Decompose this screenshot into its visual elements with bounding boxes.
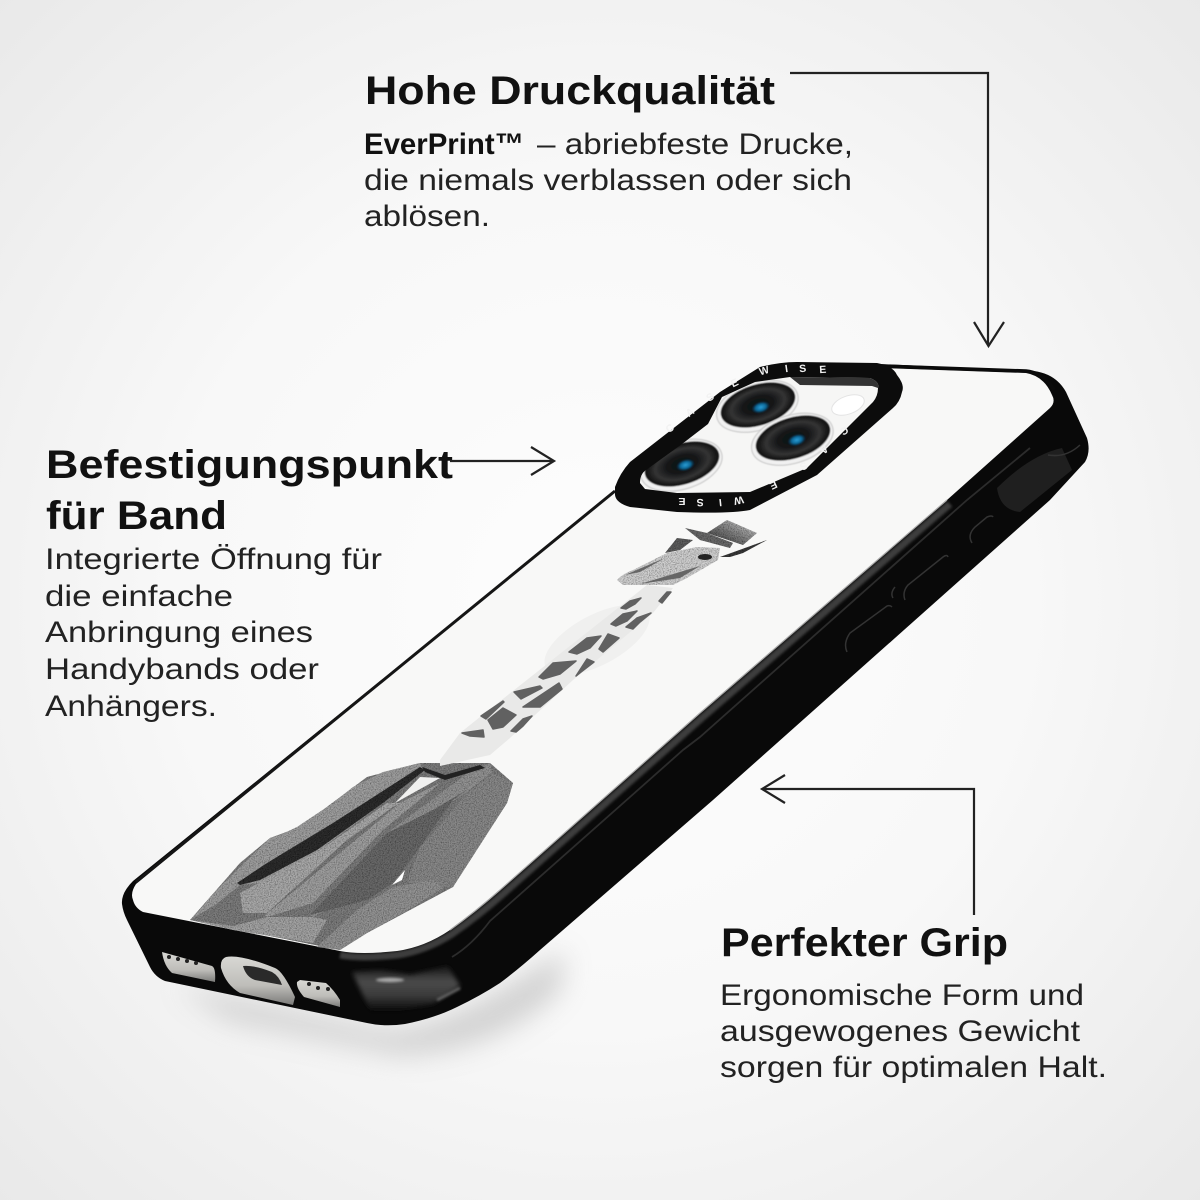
top border line: [880, 366, 1054, 390]
brand lettering bottom: S: [696, 496, 704, 508]
button gap arc: [892, 587, 895, 598]
corner streak: [437, 988, 460, 1000]
brand lettering bottom: C: [837, 423, 851, 438]
brand lettering top: C: [663, 421, 677, 436]
callout: Befestigungspunkt für Band: [45, 443, 453, 723]
body text: Handybands oder: [45, 653, 319, 686]
body text: Integrierte Öffnung für: [45, 543, 382, 576]
speaker holes right: [307, 982, 330, 991]
lower coat hem: [190, 917, 327, 943]
rim highlight: [450, 500, 947, 930]
side grip groove: [452, 448, 1030, 957]
brand lettering top: E: [729, 376, 740, 390]
island glass base: [615, 363, 902, 510]
body text: [364, 128, 853, 233]
body text: – abriebfeste Drucke,: [537, 128, 853, 161]
speaker holes left: [167, 955, 198, 965]
suit jacket: [190, 763, 513, 950]
heading: Perfekter Grip: [721, 921, 1008, 965]
lens left: [634, 430, 729, 500]
brand lettering bottom: E: [768, 478, 779, 492]
hat brim: [685, 528, 733, 548]
brand lettering bottom: [678, 423, 851, 508]
head shading: [625, 558, 700, 584]
flash: [829, 391, 867, 419]
heading: Befestigungspunkt: [46, 443, 453, 487]
body text: Anhängers.: [45, 690, 217, 723]
bow tie: [422, 765, 485, 780]
glossy bottom corner: [352, 966, 460, 1010]
collar: [440, 733, 510, 766]
soft rim along lower edge: [340, 504, 950, 957]
volume button upper: [904, 556, 948, 600]
volume button lower: [846, 606, 892, 652]
right lapel: [310, 763, 492, 917]
suit gap: [392, 870, 405, 885]
hat side brim: [720, 540, 767, 557]
brand lettering bottom: S: [797, 459, 810, 473]
left border line: [136, 491, 615, 882]
callout: Perfekter Grip: [720, 921, 1107, 1084]
magsafe ring: [534, 591, 660, 689]
vest left: [240, 803, 400, 913]
vest right: [265, 783, 440, 917]
inner top band: [790, 377, 878, 388]
body text: die einfache: [45, 580, 233, 613]
arrow: to top of case: [790, 73, 1004, 346]
island frame: [615, 362, 903, 513]
heading: [46, 443, 453, 538]
right sleeve: [407, 773, 513, 887]
head: [617, 547, 720, 585]
action button: [970, 516, 993, 543]
ear: [665, 538, 693, 553]
bottom speaker right: [297, 980, 340, 1007]
side curve highlight: [1048, 445, 1080, 456]
neck: [460, 585, 673, 738]
body text: [45, 543, 382, 723]
bottom speaker left: [162, 952, 215, 982]
body text: ablösen.: [364, 200, 490, 233]
lens right: [745, 404, 840, 474]
body text: die niemals verblassen oder sich: [364, 164, 852, 197]
case body: [122, 364, 1089, 1025]
charging port: [221, 956, 295, 1005]
suit silhouette: [190, 763, 513, 950]
brand lettering bottom: I: [718, 496, 722, 508]
brand lettering top: [663, 363, 827, 436]
brand lettering bottom: E: [678, 495, 686, 507]
callout: Hohe Druckqualität: [364, 69, 853, 233]
body text: ausgewogenes Gewicht: [720, 1015, 1081, 1048]
right coat panel: [310, 790, 467, 915]
brand lettering top: A: [684, 405, 697, 420]
body text: [720, 979, 1107, 1084]
corner highlight: [376, 978, 404, 982]
brand lettering top: E: [819, 364, 827, 376]
lapel dark strip: [237, 767, 425, 885]
brand lettering top: I: [784, 363, 789, 375]
left coat panel: [190, 763, 423, 920]
phone case illustration: [122, 362, 1089, 1055]
lens top: [710, 371, 805, 441]
neck spots: [462, 592, 671, 737]
brand lettering bottom: W: [732, 493, 745, 507]
body text: Ergonomische Form und: [720, 979, 1084, 1012]
arrow: to strap attachment: [450, 447, 554, 475]
brand lettering top: W: [758, 364, 771, 378]
charging port hole: [243, 966, 282, 985]
side grip highlight: [997, 448, 1072, 512]
brand lettering top: S: [704, 391, 717, 404]
hat crown: [707, 520, 757, 545]
shirt: [395, 777, 440, 803]
camera island: [615, 362, 903, 513]
heading: für Band: [46, 494, 227, 538]
brand lettering bottom: A: [817, 442, 831, 457]
eye: [698, 554, 712, 560]
drop shadow under phone: [175, 950, 565, 1055]
back panel: [132, 368, 1054, 953]
body text: EverPrint™: [364, 128, 524, 161]
body text: Anbringung eines: [45, 616, 313, 649]
brand lettering top: S: [799, 363, 807, 375]
heading: Hohe Druckqualität: [365, 69, 775, 113]
giraffe artwork: [190, 520, 767, 950]
body text: sorgen für optimalen Halt.: [720, 1051, 1107, 1084]
cuff: [317, 880, 443, 950]
arrow: to case side: [762, 775, 974, 915]
